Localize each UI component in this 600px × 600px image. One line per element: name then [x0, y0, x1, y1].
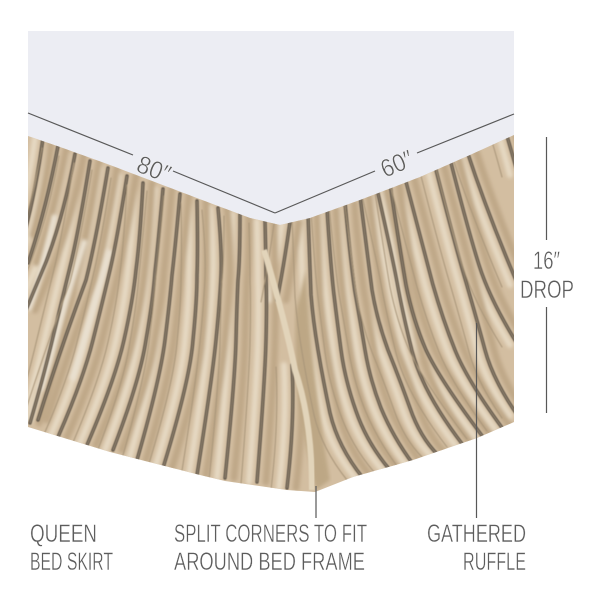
- label: 60 inches: 60″: [376, 145, 418, 184]
- dimension line: 80 inch width: [28, 113, 275, 213]
- callout: gathered ruffle: RUFFLE: [463, 548, 526, 576]
- callout: queen bed skirt: BED SKIRT: [30, 548, 113, 576]
- callout: split corners: [174, 486, 367, 576]
- label: 80 inches: 80″: [133, 150, 175, 189]
- callout: queen bed skirt: [30, 520, 113, 576]
- corner split highlight: [264, 250, 312, 490]
- corner split fold: [295, 270, 330, 490]
- callout: split corners: AROUND BED FRAME: [174, 548, 365, 576]
- fold highlights on left panel: [28, 215, 110, 390]
- panel: bed skirt fabric: [8, 130, 527, 500]
- panel: bed top: [28, 31, 514, 231]
- callout: queen bed skirt: QUEEN: [30, 520, 97, 548]
- label: 16 inch: 16″: [533, 247, 560, 275]
- callout: gathered ruffle: GATHERED: [427, 520, 526, 548]
- light fabric bands: [16, 136, 527, 488]
- callout: split corners: SPLIT CORNERS TO FIT: [174, 520, 367, 548]
- callout: gathered ruffle: [427, 323, 526, 576]
- dark woven stripes: [8, 136, 518, 490]
- label: drop: DROP: [520, 276, 574, 304]
- dimension line: 60 inch width: [275, 114, 514, 213]
